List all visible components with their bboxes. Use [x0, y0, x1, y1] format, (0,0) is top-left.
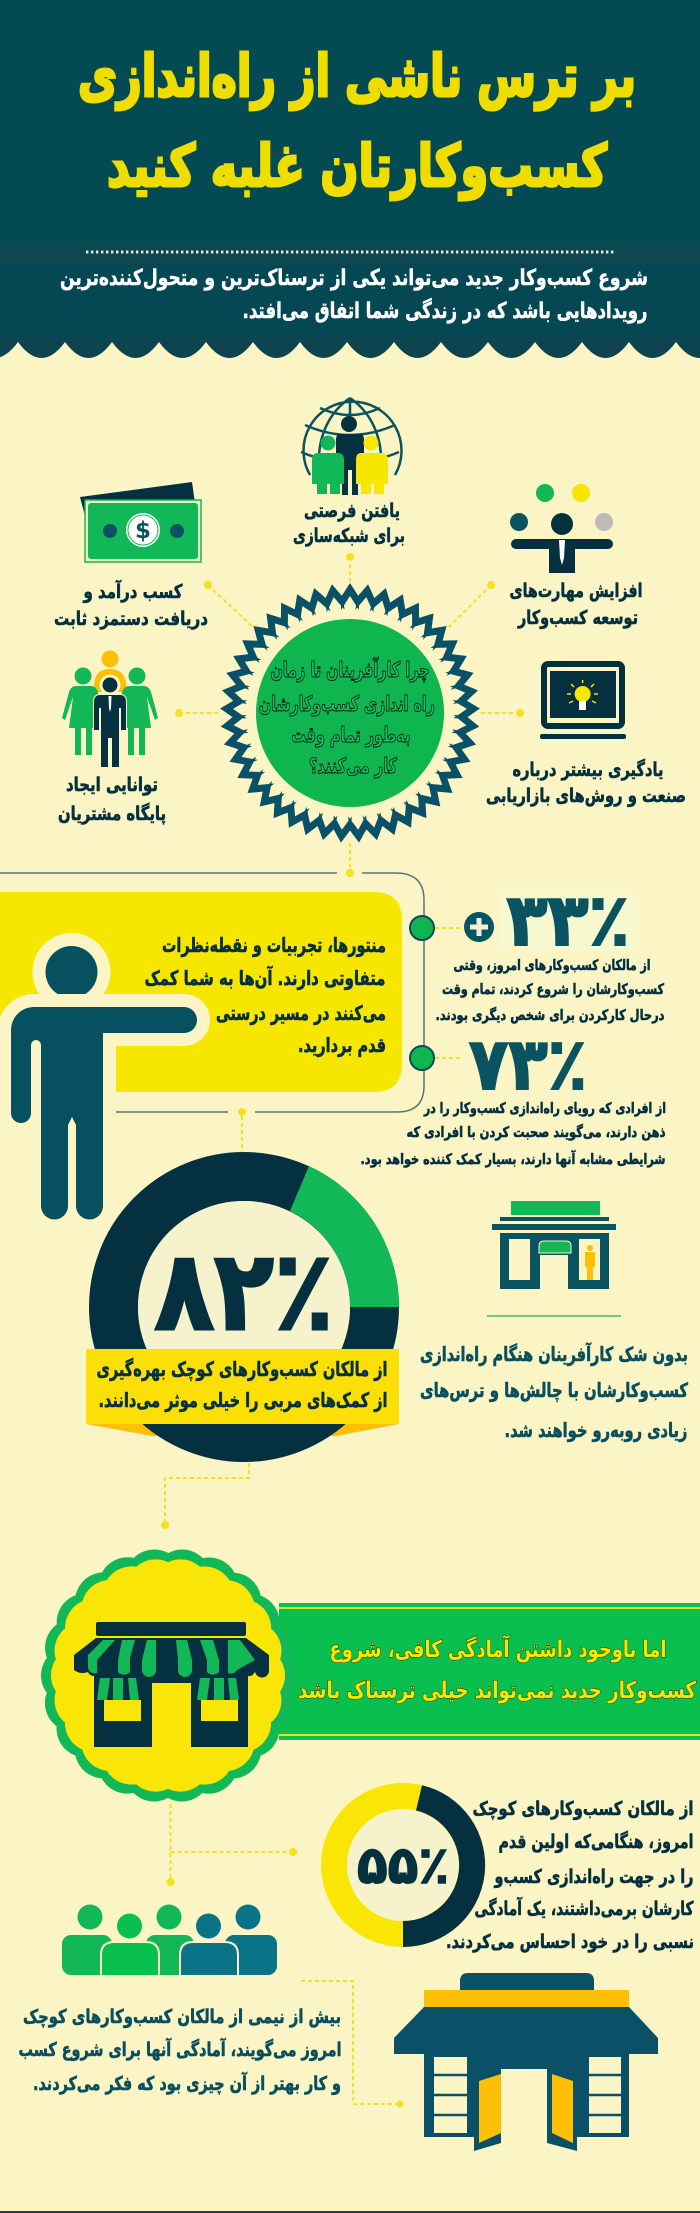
icon: building: [394, 1973, 658, 2151]
icon: money: $: [135, 518, 151, 544]
label: learning: [486, 758, 686, 807]
icon: store: [492, 1201, 616, 1289]
text: readiness: بیش از نیمی از مالکان کسب‌وکارهای کوچک: [23, 2006, 341, 2028]
marker dots: [410, 916, 460, 1070]
label: customer base: [58, 774, 166, 825]
panel: mentors: متفاوتی دارند. آن‌ها به شما کمک: [144, 965, 386, 990]
center burst badge: به‌طور تمام وقت: [292, 723, 410, 747]
banner: green: [279, 1603, 700, 1740]
label: skills: توسعه کسب‌وکار: [517, 607, 638, 629]
header band: [0, 0, 700, 358]
label: customer base: پایگاه مشتریان: [58, 802, 166, 825]
icon: team of five: [60, 1904, 280, 1980]
text: readiness: و کار بهتر از آن چیزی بود که فکر می‌کردند.: [33, 2071, 341, 2095]
text: readiness: امروز می‌گویند، آمادگی آنها برای شروع کسب: [18, 2037, 342, 2061]
label: networking: یافتن فرصتی: [304, 500, 400, 522]
connector: donut to shop: [161, 1463, 249, 1529]
icon: laptop with bulb: [540, 664, 626, 739]
label: income: دریافت دستمزد ثابت: [54, 608, 208, 630]
label: networking: [293, 500, 405, 547]
text: readiness: [18, 2006, 342, 2095]
icon: globe with people: [301, 398, 402, 495]
label: skills: [510, 580, 642, 629]
banner: 82% caption: از کمک‌های مربی را خیلی موثر می‌دانند.: [98, 1388, 388, 1412]
banner: 82% caption: از مالکان کسب‌وکارهای کوچک بهره‌گیری: [96, 1357, 388, 1382]
center burst badge: چرا کارآفرینان تا زمان: [270, 657, 430, 682]
center burst badge: کار می‌کنند؟: [309, 754, 398, 778]
connector: shop to group: [166, 1804, 297, 1886]
text: 73% description: [360, 1101, 666, 1168]
panel: mentors: منتورها، تجربیات و نقطه‌نظرات: [162, 933, 386, 957]
badge: shop icon: [68, 1576, 269, 1776]
panel: mentors: [0, 892, 402, 1092]
banner: 82% caption: [86, 1349, 399, 1424]
icon: person pointing: [11, 933, 197, 1220]
stat: 73%: ۷۳٪: [469, 1022, 587, 1106]
text: 55% description: [446, 1798, 694, 1953]
stat: 33%: ۳۳٪: [506, 878, 630, 962]
mentor frame line: [0, 869, 424, 1152]
icon: money: [80, 482, 201, 562]
text: 33% description: [436, 958, 664, 1024]
connector: group to building: [301, 1981, 404, 2108]
label: income: [54, 579, 208, 630]
label: customer base: توانایی ایجاد: [66, 774, 158, 796]
donut chart: 82%: [86, 1166, 399, 1438]
donut chart: 82%: ۸۲٪: [154, 1227, 334, 1355]
text: challenges: [420, 1342, 688, 1442]
icon: customer group: [62, 650, 158, 767]
panel: mentors: قدم بردارید.: [298, 1033, 386, 1057]
label: networking: برای شبکه‌سازی: [293, 525, 405, 547]
panel: mentors: می‌کنند در مسیر درستی: [216, 1001, 386, 1025]
icon: skills: [510, 484, 613, 573]
connector dashes around burst: [175, 553, 524, 873]
donut chart: 55%: [334, 1785, 485, 1947]
label: skills: افزایش مهارت‌های: [510, 580, 642, 602]
title: [78, 42, 636, 201]
center burst badge: [220, 583, 480, 843]
center burst badge: راه اندازی کسب‌وکارشان: [259, 692, 435, 716]
label: income: کسب درآمد و: [83, 579, 183, 603]
intro text: [60, 266, 648, 324]
donut chart: 55%: ۵۵٪: [357, 1836, 449, 1896]
